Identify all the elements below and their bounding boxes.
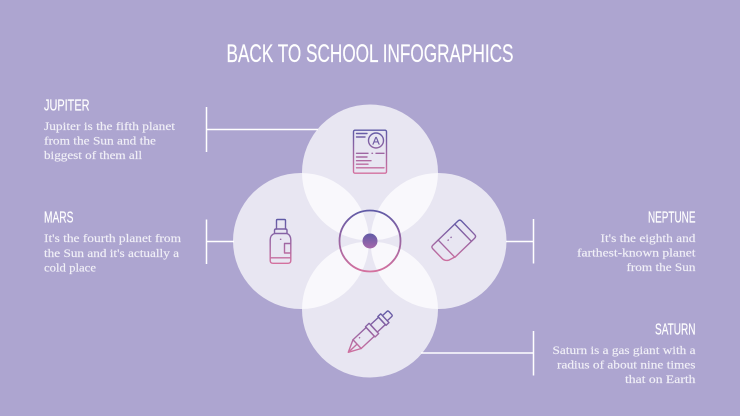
text block: Saturn: radius of about nine times [557,358,696,372]
text block: Mars: the Sun and it's actually a [44,247,179,260]
text block: Jupiter: biggest of them all [44,149,142,162]
connector: Jupiter [206,107,318,152]
center ring and dot [340,210,400,272]
text block: Mars [44,210,181,274]
connector: Mars [206,220,234,264]
circle cluster [233,104,506,378]
text block: Neptune: NEPTUNE [648,210,696,226]
text block: Jupiter: Jupiter is the fifth planet [44,120,176,133]
text block: Saturn: SATURN [655,322,696,338]
text block: Neptune: from the Sun [626,261,696,274]
connector: Saturn [421,331,534,376]
text block: Saturn: that on Earth [625,373,696,386]
text block: Saturn: Saturn is a gas giant with a [552,344,696,357]
text block: Saturn [552,322,696,386]
icon: pen [344,308,395,357]
text block: Mars: It's the fourth planet from [44,232,181,245]
icon: glue bottle [270,220,291,263]
icon: eraser [431,219,476,264]
text block: Jupiter: from the Sun and the [44,134,156,148]
title: BACK TO SCHOOL INFOGRAPHICS [226,40,514,68]
text block: Jupiter: JUPITER [44,98,90,114]
text block: Mars: MARS [44,210,74,226]
icon: graded paper: A [372,136,380,148]
text block: Neptune: It's the eighth and [600,232,696,245]
text block: Jupiter [44,98,176,162]
icon: graded paper [354,130,386,173]
text block: Neptune [577,210,696,274]
text block: Neptune: farthest-known planet [577,246,696,260]
text block: Mars: cold place [44,262,96,274]
connector: Neptune [506,219,534,264]
